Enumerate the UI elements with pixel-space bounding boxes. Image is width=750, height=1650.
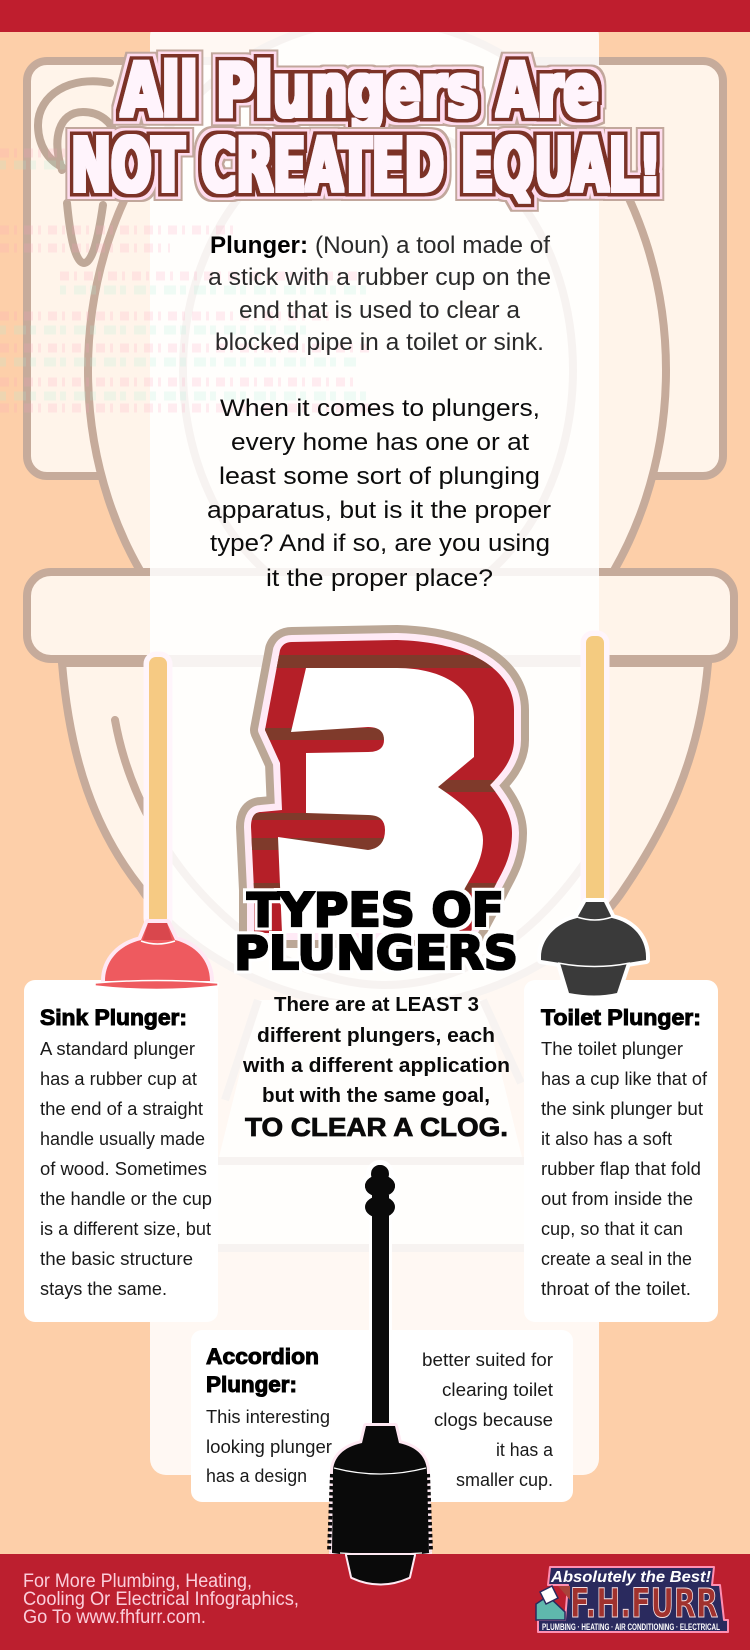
icon: accordion plunger bbox=[329, 1165, 431, 1584]
footer text bbox=[23, 1571, 299, 1628]
toilet plunger text: rubber flap that fold bbox=[541, 1159, 701, 1179]
panel: accordion plunger card bbox=[191, 1330, 573, 1502]
center description: with a different application bbox=[242, 1055, 510, 1077]
toilet rim bbox=[27, 572, 734, 659]
heading line 1: TYPES OF bbox=[247, 883, 504, 937]
intro text: least some sort of plunging bbox=[219, 463, 540, 490]
intro text: When it comes to plungers, bbox=[220, 395, 540, 422]
definition text: end that is used to clear a bbox=[239, 297, 521, 324]
sink plunger text: has a rubber cup at bbox=[40, 1069, 197, 1089]
center description: TO CLEAR A CLOG. bbox=[245, 1112, 508, 1142]
heading line 2: PLUNGERS bbox=[234, 926, 518, 980]
center description: but with the same goal, bbox=[262, 1085, 490, 1107]
sink plunger text: is a different size, but bbox=[40, 1219, 211, 1239]
accordion plunger text: better suited for bbox=[422, 1350, 553, 1370]
toilet plunger text: Toilet Plunger: bbox=[541, 1005, 701, 1030]
sink plunger text: handle usually made bbox=[40, 1129, 205, 1149]
icon: toilet plunger bbox=[541, 636, 646, 996]
center description bbox=[242, 994, 510, 1142]
accordion plunger text: Accordion bbox=[206, 1344, 319, 1369]
sink plunger text: stays the same. bbox=[40, 1279, 167, 1299]
sink plunger text: the end of a straight bbox=[40, 1099, 203, 1119]
toilet plunger text: it also has a soft bbox=[541, 1129, 672, 1149]
sink plunger text: A standard plunger bbox=[40, 1039, 195, 1059]
title bbox=[71, 48, 661, 209]
sink plunger text: the basic structure bbox=[40, 1249, 193, 1269]
accordion plunger text bbox=[206, 1344, 554, 1490]
toilet plunger text: the sink plunger but bbox=[541, 1099, 703, 1119]
toilet lower bowl bbox=[62, 663, 708, 1007]
sink plunger text: of wood. Sometimes bbox=[40, 1159, 207, 1179]
logo tagline: Absolutely the Best! bbox=[550, 1569, 712, 1586]
panel: toilet plunger card bbox=[524, 980, 718, 1322]
toilet plunger text bbox=[541, 1005, 708, 1299]
center description: There are at LEAST 3 bbox=[274, 994, 479, 1016]
sink plunger text: the handle or the cup bbox=[40, 1189, 212, 1209]
top bar bbox=[0, 0, 750, 32]
accordion plunger text: clearing toilet bbox=[442, 1380, 553, 1400]
toilet plunger text: has a cup like that of bbox=[541, 1069, 708, 1089]
definition text bbox=[208, 232, 551, 356]
toilet bowl inner ring bbox=[183, 124, 573, 616]
intro text bbox=[207, 395, 551, 592]
definition text: blocked pipe in a toilet or sink. bbox=[215, 329, 544, 356]
toilet plunger text: throat of the toilet. bbox=[541, 1279, 691, 1299]
toilet plunger text: out from inside the bbox=[541, 1189, 693, 1209]
definition text: a stick with a rubber cup on the bbox=[208, 264, 551, 291]
footer text: Go To www.fhfurr.com. bbox=[23, 1607, 206, 1628]
footer text: Cooling Or Electrical Infographics, bbox=[23, 1589, 299, 1610]
big number 3 bbox=[240, 640, 530, 933]
accordion plunger text: clogs because bbox=[434, 1410, 553, 1430]
center description: different plungers, each bbox=[257, 1025, 495, 1047]
toilet plunger text: The toilet plunger bbox=[541, 1039, 683, 1059]
footer bar bbox=[0, 1554, 750, 1650]
sink plunger text bbox=[40, 1005, 212, 1299]
panel: sink plunger card bbox=[24, 980, 218, 1322]
accordion plunger text: smaller cup. bbox=[456, 1470, 553, 1490]
flush handle bbox=[38, 81, 115, 263]
definition text: (Noun) a tool made of bbox=[315, 232, 550, 259]
accordion plunger text: Plunger: bbox=[206, 1372, 297, 1397]
glitch ghost artefacts bbox=[0, 153, 375, 408]
definition text: Plunger: bbox=[210, 232, 308, 259]
heading: types of plungers bbox=[234, 883, 518, 980]
toilet upper bowl bbox=[84, 32, 670, 568]
icon: accordion plunger cup over footer bbox=[347, 1555, 414, 1584]
logo icon bbox=[536, 1586, 570, 1620]
toilet plunger text: create a seal in the bbox=[541, 1249, 692, 1269]
toilet base bbox=[160, 1000, 590, 1248]
center panel bbox=[150, 20, 599, 1475]
logo: F.H. Furr bbox=[536, 1567, 728, 1632]
sink plunger text: Sink Plunger: bbox=[40, 1005, 187, 1030]
intro text: it the proper place? bbox=[266, 565, 493, 592]
icon: sink plunger bbox=[95, 657, 218, 990]
toilet plunger text: cup, so that it can bbox=[541, 1219, 683, 1239]
toilet seat line bbox=[115, 720, 590, 985]
accordion plunger text: looking plunger bbox=[206, 1437, 332, 1457]
toilet illustration bbox=[27, 20, 734, 1248]
intro text: apparatus, but is it the proper bbox=[207, 497, 551, 524]
toilet tank bbox=[27, 61, 723, 476]
accordion plunger text: This interesting bbox=[206, 1407, 330, 1427]
intro text: type? And if so, are you using bbox=[210, 530, 550, 557]
accordion plunger text: has a design bbox=[206, 1466, 307, 1486]
intro text: every home has one or at bbox=[231, 429, 529, 456]
footer text: For More Plumbing, Heating, bbox=[23, 1571, 252, 1592]
accordion plunger text: it has a bbox=[496, 1440, 554, 1460]
